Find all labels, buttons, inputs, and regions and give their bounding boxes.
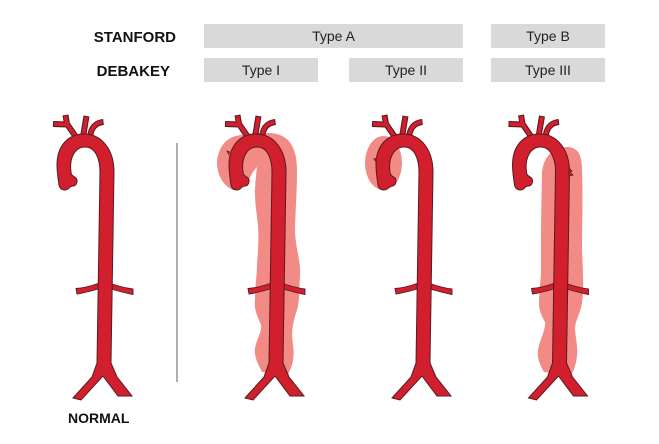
bar: DeBakey Type III: Type III bbox=[525, 62, 571, 78]
bar: DeBakey Type I bbox=[204, 58, 318, 82]
bar: DeBakey Type III bbox=[491, 58, 605, 82]
pink false lumen: Type III bbox=[538, 147, 583, 375]
pink false lumen: Type I bbox=[217, 133, 300, 376]
bar: DeBakey Type II bbox=[349, 58, 463, 82]
label: DeBakey: DEBAKEY bbox=[97, 63, 170, 80]
bar: DeBakey Type II: Type II bbox=[385, 62, 427, 78]
bar: Stanford Type A bbox=[204, 24, 463, 48]
aorta: normal bbox=[53, 115, 133, 400]
label: Normal: NORMAL bbox=[68, 410, 130, 426]
tear: Type II bbox=[374, 158, 377, 162]
tear: Type III bbox=[569, 168, 573, 176]
aorta: Type II dissection bbox=[365, 115, 452, 400]
bar: Stanford Type A: Type A bbox=[312, 28, 355, 44]
aorta: Type III dissection bbox=[508, 115, 588, 400]
pink false lumen: Type II bbox=[365, 136, 402, 190]
aorta: Type I dissection bbox=[217, 115, 305, 400]
bar: DeBakey Type I: Type I bbox=[242, 62, 280, 78]
bar: Stanford Type B: Type B bbox=[526, 28, 570, 44]
divider line bbox=[176, 143, 178, 382]
tear: Type I bbox=[227, 151, 230, 155]
label: Stanford: STANFORD bbox=[94, 29, 176, 46]
bar: Stanford Type B bbox=[491, 24, 605, 48]
